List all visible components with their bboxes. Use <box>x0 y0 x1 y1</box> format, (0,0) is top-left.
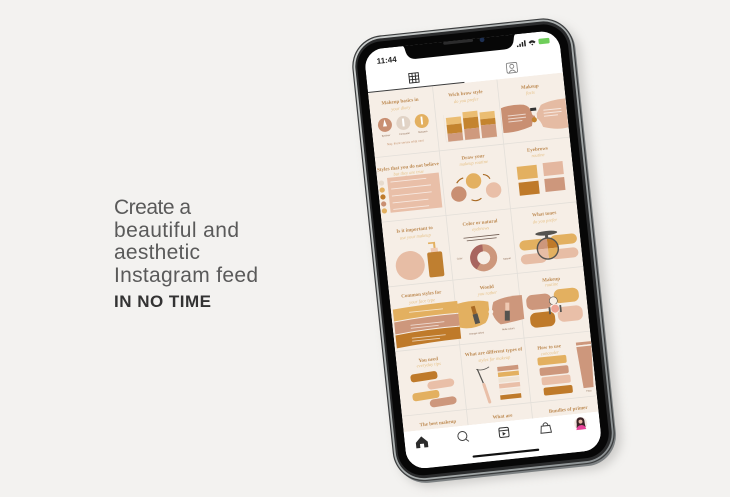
status bar <box>376 38 550 66</box>
post: different types <box>465 347 528 404</box>
stacked bar 1 <box>446 116 463 142</box>
donut chart <box>473 247 495 269</box>
post: how to use: How to use <box>537 344 562 352</box>
headline text: Create a <box>114 196 191 219</box>
post: makeup basics: Mascara <box>418 130 428 134</box>
type list <box>497 365 521 400</box>
post: how to use <box>536 341 596 398</box>
right blob <box>535 98 568 131</box>
post: common styles stripes: your face type <box>408 297 435 305</box>
post: what tones compact <box>519 212 578 264</box>
icon: lipstick left <box>470 306 480 324</box>
icon: mirrors <box>547 296 562 314</box>
post: would you rather lipsticks: you rather <box>477 290 497 297</box>
stacked bar 3 <box>479 111 497 138</box>
notch <box>401 31 518 60</box>
bottom navigation <box>404 412 603 472</box>
status bar: 11:44 <box>376 55 398 66</box>
post: what tones compact: do you prefer <box>532 217 558 224</box>
post: would you rather lipsticks: Orange colors <box>469 331 485 336</box>
icon: home <box>415 436 428 448</box>
icon: search <box>457 431 469 442</box>
post: draw your circles diagram: makeup routine <box>459 159 488 167</box>
post: makeup basics: Nay, there serves what next <box>387 138 424 146</box>
post: makeup basics: Makeup basics in <box>381 98 419 107</box>
post: eyebrows cards: Eyebrows <box>527 147 548 154</box>
icon: reels <box>499 427 509 438</box>
post: draw your circles diagram: Draw your <box>461 154 486 162</box>
post: brow style bar chart: do you prefer <box>454 96 479 104</box>
post: styles list <box>377 162 444 214</box>
post: common styles stripes: Common styles for <box>401 290 442 300</box>
post: how to use: concealer <box>540 349 559 356</box>
post: you need strokes: everyday tips <box>416 361 441 368</box>
post: color or natural donut: Color <box>457 257 463 261</box>
post: makeup basics: your diary <box>390 105 412 112</box>
headline text: IN NO TIME <box>114 292 211 311</box>
post: styles list: but they are true <box>393 169 424 177</box>
headline text: beautiful and <box>114 219 239 242</box>
icon: lipstick right <box>505 303 510 321</box>
post: makeup compare <box>500 84 568 133</box>
icon: compact <box>535 230 560 260</box>
icon: bottle <box>426 241 445 278</box>
icon: tagged tab <box>506 62 518 73</box>
icon: eyeliner <box>378 118 392 132</box>
post: you need strokes: You need <box>418 357 439 364</box>
phone screen <box>363 27 603 472</box>
icon: mascara <box>414 114 429 128</box>
headline text: Instagram feed <box>114 264 258 287</box>
post: common styles stripes <box>391 289 461 348</box>
post: what tones compact: What tones <box>532 211 557 218</box>
peach circle <box>396 251 425 280</box>
list panel <box>387 173 442 213</box>
post: color or natural donut: Natural <box>503 257 511 261</box>
post: makeup basics: Eyeliner <box>382 134 391 138</box>
icon: grid tab <box>409 73 419 83</box>
post: would you rather lipsticks: Would <box>480 285 494 291</box>
post: would you rather lipsticks: Nude colors <box>502 327 516 331</box>
post: brow style bar chart: Wich brow style <box>448 90 484 99</box>
phone mockup <box>349 15 624 490</box>
post: makeup compare: facts <box>526 90 535 95</box>
post: makeup blobs with mirror: Makeup <box>542 277 561 284</box>
post: bottom row titles <box>420 406 588 426</box>
headline text <box>114 196 258 311</box>
post: how to use: Face <box>586 389 592 393</box>
post: is it important, bottle <box>396 226 444 280</box>
icon: tube <box>576 341 596 388</box>
stacked bar 2 <box>462 111 480 140</box>
post: makeup compare: Makeup <box>521 84 539 91</box>
post: bottom row titles: What are <box>492 414 514 421</box>
post: eyebrows cards: routine <box>531 152 545 158</box>
headline text: aesthetic <box>114 241 200 264</box>
post: different types: styles for makeup <box>478 355 511 363</box>
post: makeup basics <box>378 98 429 146</box>
post: would you rather lipsticks <box>458 284 524 335</box>
post: makeup basics: Concealer <box>399 132 410 136</box>
home indicator <box>472 449 539 458</box>
post: bottom row titles: Bundles of primer <box>549 406 589 415</box>
post: is it important, bottle: use your makeup <box>399 232 432 240</box>
post: color or natural donut <box>453 218 512 271</box>
post: is it important, bottle: Is it important to <box>396 226 434 235</box>
phone body <box>349 15 619 486</box>
post: color or natural donut: Color or natural <box>462 219 498 228</box>
post: different types: What are different types of <box>465 347 523 358</box>
post: color or natural donut: eyebrows <box>472 225 490 232</box>
post: eyebrows cards <box>515 145 566 196</box>
left blob <box>501 103 536 133</box>
icon: concealer <box>396 116 410 130</box>
phone shadow <box>355 21 624 490</box>
arrows <box>456 174 492 202</box>
icon: shop <box>540 422 551 433</box>
post: brow style bar chart <box>441 89 498 142</box>
post: draw your circles diagram <box>451 154 502 202</box>
post: bottom row titles: The best makeup <box>419 420 457 428</box>
post: makeup blobs with mirror <box>524 275 584 328</box>
icon: makeup item <box>530 108 538 123</box>
post: makeup blobs with mirror: routine <box>545 281 558 288</box>
icon: profile avatar <box>574 416 588 431</box>
active tab underline <box>368 82 464 93</box>
post: you need strokes <box>410 356 456 408</box>
post: styles list: Styles that you do not believe <box>377 162 440 173</box>
post grid <box>368 73 599 432</box>
icon: mascara wand <box>476 367 493 403</box>
